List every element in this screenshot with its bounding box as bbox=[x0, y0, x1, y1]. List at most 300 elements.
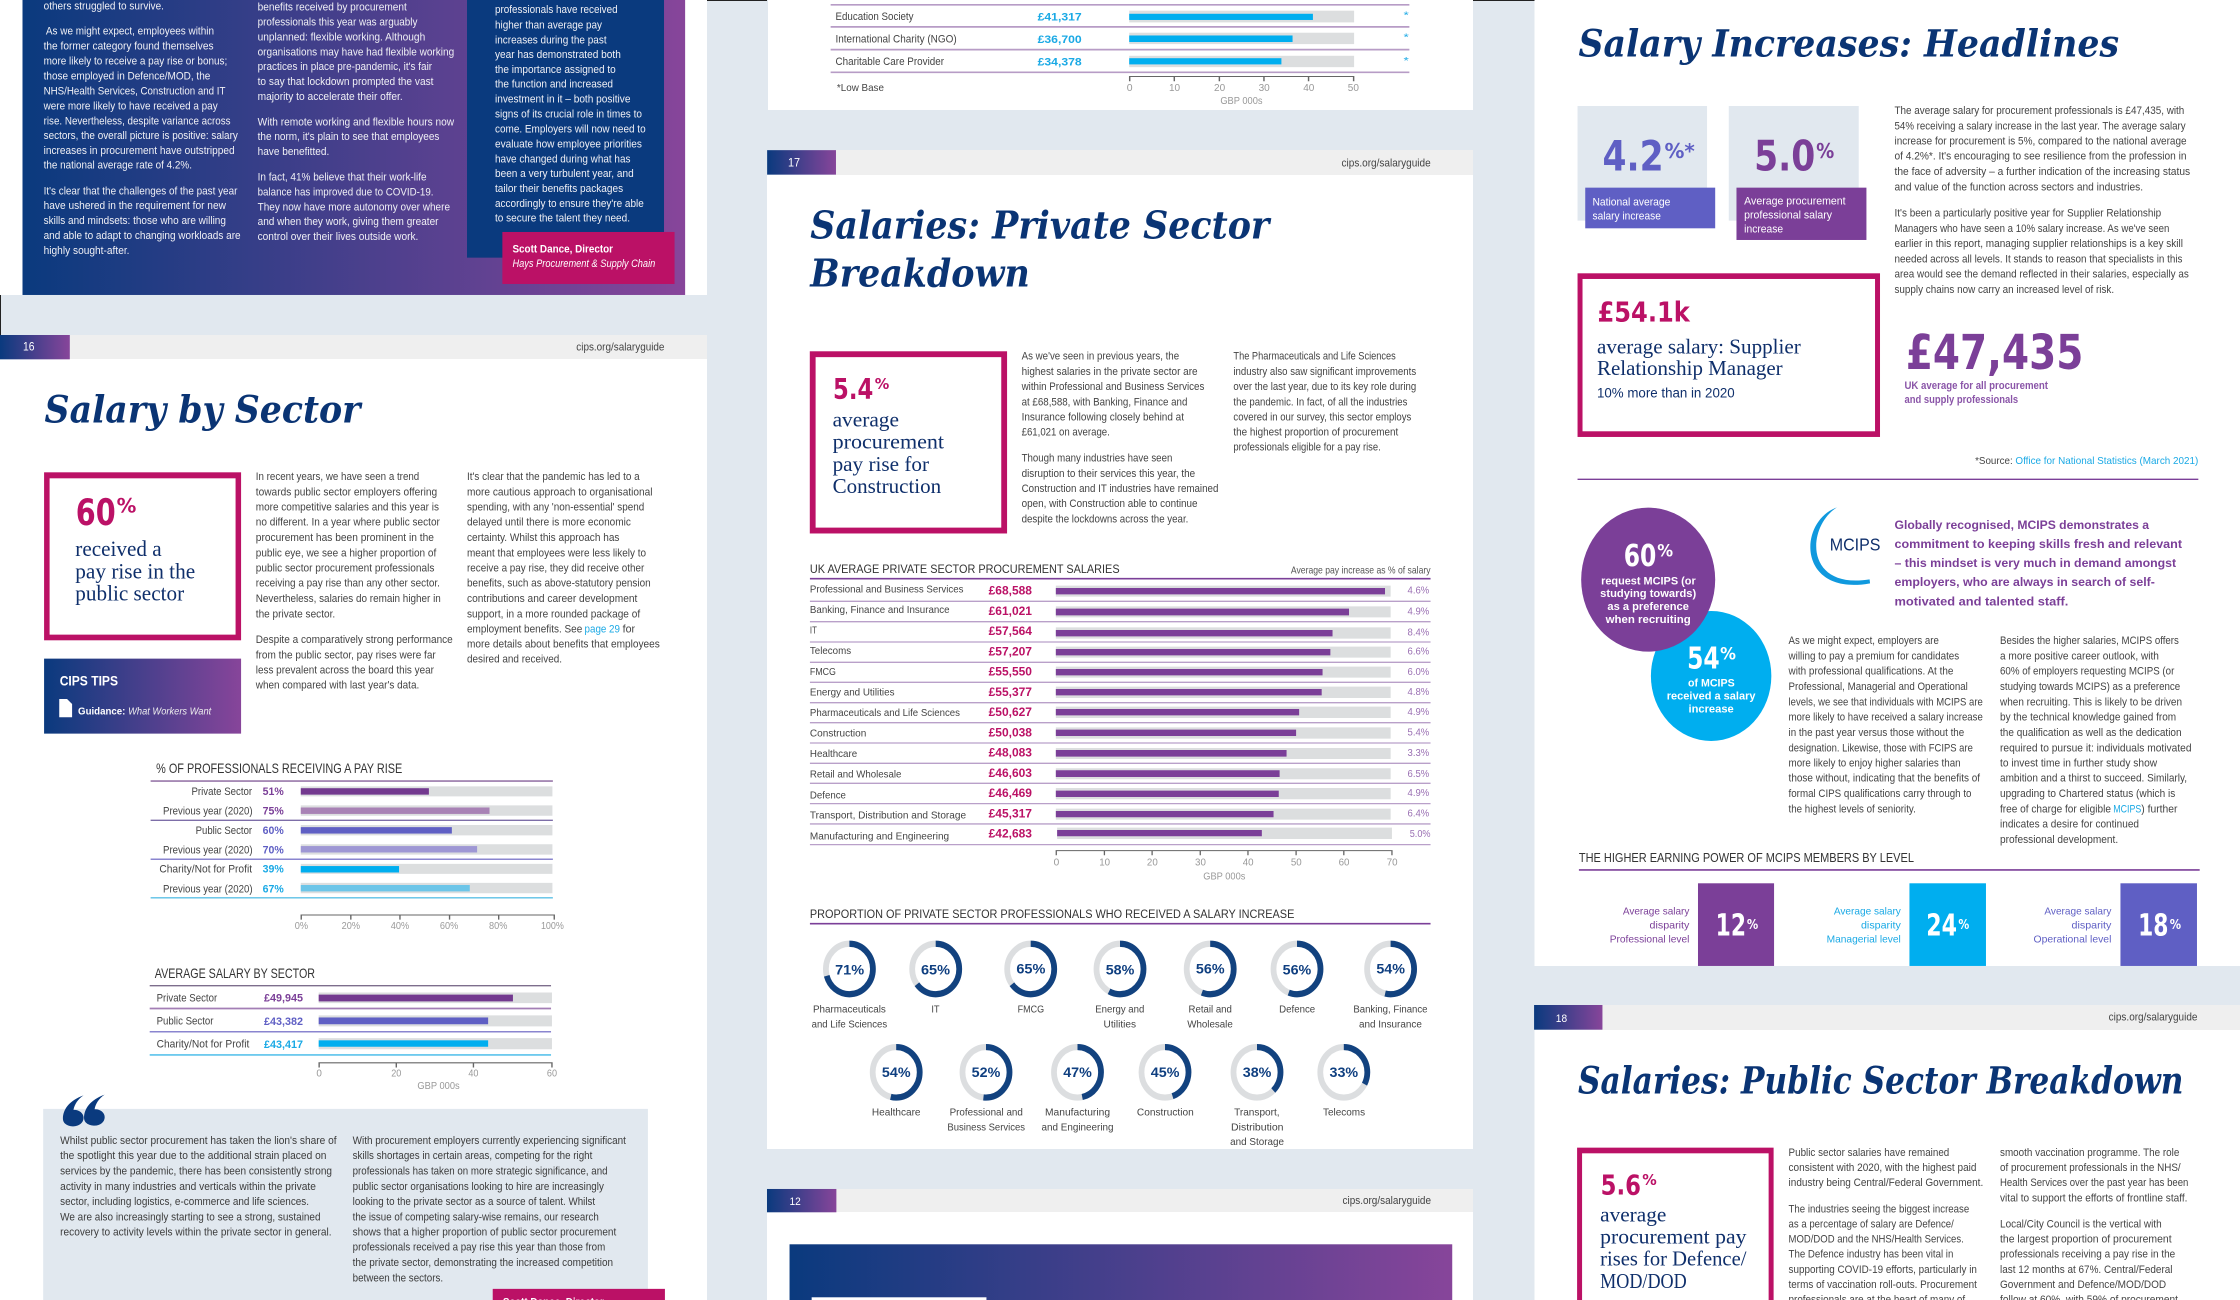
donut captions: Banking, Finance bbox=[1353, 1003, 1428, 1015]
text block: intro left: receiving a pay rise than any other sector. bbox=[256, 577, 440, 589]
panel: CIPS tips bbox=[44, 659, 241, 734]
donut percentages: 33% bbox=[1329, 1065, 1358, 1080]
axis bbox=[1054, 851, 1398, 882]
text block: right column: a more positive career outlook, with bbox=[2000, 649, 2159, 662]
text block: second column: unplanned: flexible working. Although bbox=[258, 30, 425, 43]
salary values: £48,083 bbox=[989, 746, 1032, 759]
salary values: £55,550 bbox=[989, 665, 1032, 678]
bar chart: percent receiving a pay rise: Public Sector bbox=[196, 824, 252, 836]
axis: 20 bbox=[1147, 857, 1158, 868]
text block: left: open, with Construction able to continue bbox=[1022, 497, 1198, 510]
bar chart: average salary by sector: 0 bbox=[316, 1069, 322, 1079]
title: Salaries: Private Sector bbox=[810, 203, 1272, 248]
callout: 5.4 percent: pay rise for bbox=[833, 452, 929, 476]
text block: quote right bbox=[353, 1134, 626, 1284]
text block: second column: organisations may have had flexible working bbox=[258, 45, 454, 58]
stat: procurement 5.0 percent bbox=[1729, 106, 1866, 240]
chart axis: 10 bbox=[1169, 83, 1180, 93]
text block: left column: The Defence industry has been vital in bbox=[1789, 1248, 1953, 1260]
donut captions: Telecoms bbox=[1323, 1106, 1365, 1118]
donut captions: Professional and bbox=[950, 1106, 1023, 1118]
text block: intro right: meant that employees were less likely to bbox=[467, 546, 646, 559]
text block: right column bbox=[1999, 634, 2192, 846]
callout: 5.6 percent: procurement pay bbox=[1600, 1226, 1747, 1248]
donut captions: and Life Sciences bbox=[812, 1018, 887, 1030]
bar chart: average salary by sector: 60 bbox=[547, 1069, 557, 1079]
stat: procurement 5.0 percent: 5.0 bbox=[1754, 132, 1815, 181]
text block: right column: Local/City Council is the vertical with bbox=[2000, 1217, 2162, 1230]
text block: intro right: for bbox=[623, 622, 636, 635]
circles: MCIPS statistics: as a preference bbox=[1607, 600, 1689, 613]
text block: first column: skills and mindsets: those who are willing bbox=[44, 214, 226, 227]
axis: 10 bbox=[1099, 857, 1110, 868]
stat: managerial level 24 percent: disparity bbox=[1861, 919, 1902, 931]
text block: third column: investment in it – both positive bbox=[495, 93, 630, 105]
circles: MCIPS statistics: 54 bbox=[1687, 640, 1720, 676]
pay increase percentages: 5.0% bbox=[1410, 829, 1431, 839]
callout: 5.6 percent: % bbox=[1642, 1172, 1657, 1189]
donut charts: proportion receiving a salary increase: PROPORTION OF PRIVATE SECTOR PROFESSIONALS WHO RECEIVED A SALARY INCREASE bbox=[810, 907, 1294, 921]
bar chart: percent receiving a pay rise: 67% bbox=[263, 883, 284, 895]
highlighted statement: motivated and talented staff. bbox=[1895, 595, 2068, 609]
chart row: education society: * bbox=[1404, 10, 1409, 21]
callout: 60 percent: % bbox=[117, 495, 136, 518]
icon: MCIPS arc: MCIPS bbox=[1830, 535, 1880, 555]
chart row: education society: Education Society bbox=[835, 10, 914, 23]
text block: intro left bbox=[255, 470, 453, 691]
text block: left column bbox=[1788, 634, 1983, 815]
donut captions: Utilities bbox=[1104, 1018, 1136, 1030]
text block: left: despite the lockdowns across the year. bbox=[1022, 513, 1188, 525]
page number badge: 18 bbox=[1556, 1012, 1567, 1024]
bar chart: average salary by sector: AVERAGE SALARY BY SECTOR bbox=[155, 967, 315, 981]
text block: right column: ) further bbox=[2141, 802, 2178, 815]
page number badge: 17 bbox=[788, 156, 800, 170]
text block: left column: more likely to enjoy higher salaries than bbox=[1789, 757, 1961, 769]
panel: CIPS tips: What Workers Want bbox=[128, 705, 212, 717]
donut percentages: 65% bbox=[921, 962, 950, 978]
text block: intro left: public sector procurement professionals bbox=[256, 561, 435, 574]
salary values: £61,021 bbox=[989, 605, 1032, 617]
text block: left column: industry being Central/Federal Government. bbox=[1789, 1176, 1983, 1189]
page number badge bbox=[767, 150, 836, 175]
panel: page 17 private sector breakdown bbox=[767, 150, 1473, 1149]
pay increase percentages: 4.9% bbox=[1408, 707, 1429, 718]
callout: 60 percent: pay rise in the bbox=[75, 558, 195, 583]
text block: left column: consistent with 2020, with the highest paid bbox=[1789, 1161, 1976, 1174]
donut percentages: 65% bbox=[1016, 962, 1045, 977]
callout: 60 percent: received a bbox=[75, 536, 162, 561]
text block: quote left: the spotlight this year due to the additional strain placed on bbox=[60, 1149, 326, 1162]
stat: professional level 12 percent: Average salary bbox=[1623, 905, 1690, 917]
text block: intro right: desired and received. bbox=[467, 653, 562, 665]
text block: first column: NHS/Health Services, Construction and IT bbox=[44, 84, 225, 97]
text block: intro left: public eye, we see a higher proportion of bbox=[256, 546, 436, 559]
text block: quote right: the issue of competing salary-wise remains, our research bbox=[353, 1210, 599, 1223]
salary values: £50,627 bbox=[989, 706, 1032, 719]
text block: first column: and able to adapt to changing workloads are bbox=[44, 229, 241, 242]
panel: page 16 salary by sector bbox=[0, 335, 707, 1300]
title: Breakdown bbox=[809, 251, 1030, 296]
bar chart: average salary by sector: Public Sector bbox=[157, 1015, 214, 1027]
text block: left column: as a percentage of salary are Defence/ bbox=[1789, 1217, 1954, 1230]
text block: intro right: support, in a more rounded package of bbox=[467, 607, 640, 620]
chart row: international charity: £36,700 bbox=[1038, 32, 1082, 45]
circles: MCIPS statistics: studying towards) bbox=[1600, 587, 1696, 600]
callout: 5.4 percent: average bbox=[833, 408, 899, 431]
bar chart: private sector salaries bbox=[810, 562, 1431, 882]
page number badge: 12 bbox=[790, 1195, 801, 1207]
pay increase percentages: 5.4% bbox=[1408, 728, 1429, 738]
chart axis bbox=[1127, 76, 1359, 107]
row labels: Energy and Utilities bbox=[810, 686, 895, 698]
highlighted statement: employers, who are always in search of self- bbox=[1895, 576, 2155, 589]
donut percentages: 38% bbox=[1243, 1065, 1271, 1080]
row labels: Pharmaceuticals and Life Sciences bbox=[810, 706, 960, 718]
stat: professional level 12 percent bbox=[1610, 883, 1774, 966]
text block: left column: As we might expect, employers are bbox=[1789, 634, 1939, 647]
bar chart: private sector salaries: Average pay increase as % of salary bbox=[1291, 566, 1431, 576]
callout: supplier relationship manager: Relationship Manager bbox=[1597, 357, 1783, 380]
text block: intro left: no different. In a year where public sector bbox=[256, 516, 440, 528]
stat: operational level 18 percent bbox=[2034, 883, 2197, 966]
text block: left: Insurance following closely behind at bbox=[1022, 411, 1184, 423]
text block: third column: professionals have received bbox=[495, 3, 618, 16]
attribution box bbox=[493, 1289, 665, 1300]
pay increase percentages: 6.6% bbox=[1408, 647, 1429, 657]
chart row: international charity: International Charity (NGO) bbox=[835, 33, 957, 45]
text block: right bbox=[1233, 350, 1416, 453]
text block: left column: the highest levels of seniority. bbox=[1789, 802, 1916, 815]
text block: right column: professional development. bbox=[2000, 833, 2118, 846]
text block: quote right: shows that a higher proportion of public sector procurement bbox=[353, 1225, 617, 1238]
panel: charity salaries fragment bbox=[768, 0, 1473, 110]
chart row: charitable care provider bbox=[835, 55, 1409, 68]
text block: quote right: the private sector, demonstrating the increased competition bbox=[353, 1256, 613, 1269]
text block: second column: balance has improved due to COVID-19. bbox=[258, 185, 433, 198]
text block: right column: indicates a desire for continued bbox=[2000, 818, 2139, 830]
icon: MCIPS arc bbox=[1810, 507, 1880, 585]
donut percentages: 71% bbox=[835, 962, 864, 978]
text block: first column: the former category found themselves bbox=[44, 40, 214, 52]
source note: *Source: bbox=[1975, 455, 2013, 466]
text block: right: professionals eligible for a pay rise. bbox=[1233, 441, 1381, 453]
site url: cips.org/salaryguide bbox=[1342, 156, 1431, 169]
stat: procurement 5.0 percent: increase bbox=[1744, 222, 1783, 235]
axis: 40 bbox=[1243, 857, 1254, 868]
row labels: Manufacturing and Engineering bbox=[810, 830, 949, 842]
pay increase percentages bbox=[1408, 586, 1431, 839]
text block: quote right: between the sectors. bbox=[353, 1271, 443, 1284]
row labels: Construction bbox=[810, 727, 866, 739]
circles: MCIPS statistics: % bbox=[1720, 644, 1736, 664]
bar chart: percent receiving a pay rise: 39% bbox=[263, 863, 284, 875]
text block: third column: higher than average pay bbox=[495, 18, 602, 31]
donut percentages: 54% bbox=[882, 1065, 911, 1080]
stat: operational level 18 percent: Operational level bbox=[2034, 933, 2111, 945]
text block: intro left: more competitive salaries and this year is bbox=[256, 501, 439, 513]
donut captions: Business Services bbox=[947, 1121, 1025, 1133]
circles: MCIPS statistics: 60 bbox=[1624, 537, 1656, 574]
bar chart: average salary by sector: Charity/Not for Profit bbox=[157, 1038, 250, 1050]
row labels: Telecoms bbox=[810, 645, 851, 657]
text block: second column: They now have more autonomy over where bbox=[258, 200, 450, 213]
chart row: charitable care provider: * bbox=[1404, 56, 1409, 67]
circles: MCIPS statistics: % bbox=[1657, 542, 1673, 561]
stat: professional level 12 percent: % bbox=[1747, 916, 1758, 932]
text block: second column: control over their lives outside work. bbox=[258, 230, 418, 243]
stat: national average 4.2 percent: %* bbox=[1664, 139, 1695, 163]
circles: MCIPS statistics: request MCIPS (or bbox=[1601, 574, 1696, 587]
text block: third column: the importance assigned to bbox=[495, 63, 616, 76]
text block: quote left: services by the pandemic, there has been consistently strong bbox=[60, 1164, 332, 1177]
text block: intro left: from the public sector, pay rises were far bbox=[256, 648, 436, 661]
donut captions: and Storage bbox=[1230, 1135, 1284, 1147]
circles: MCIPS statistics: increase bbox=[1688, 702, 1734, 715]
stat: national average 4.2 percent: salary increase bbox=[1592, 209, 1661, 222]
bar chart: percent receiving a pay rise: % OF PROFESSIONALS RECEIVING A PAY RISE bbox=[156, 762, 402, 777]
text block: second column: With remote working and flexible hours now bbox=[258, 115, 454, 128]
salary values: £42,683 bbox=[989, 827, 1032, 840]
donut captions: Pharmaceuticals bbox=[813, 1003, 886, 1015]
donut captions: Retail and bbox=[1189, 1003, 1232, 1015]
salary values: £57,564 bbox=[989, 625, 1032, 638]
row labels: Transport, Distribution and Storage bbox=[810, 809, 966, 821]
text block: left column: formal CIPS qualifications carry through to bbox=[1789, 787, 1971, 800]
pay increase percentages: 3.3% bbox=[1408, 748, 1429, 758]
callout: supplier relationship manager: £54.1k bbox=[1597, 296, 1690, 328]
text block: right column: to invest time in further study show bbox=[2000, 757, 2158, 769]
heading: earning power: THE HIGHER EARNING POWER OF MCIPS MEMBERS BY LEVEL bbox=[1579, 851, 1914, 865]
stat: managerial level 24 percent bbox=[1827, 883, 1986, 966]
text block: right: over the last year, due to its key role during bbox=[1233, 380, 1416, 393]
bar chart: average salary by sector: GBP 000s bbox=[417, 1081, 460, 1092]
text block: left: Construction and IT industries have remained bbox=[1022, 482, 1218, 495]
text block: intro right: more details about benefits that employees bbox=[467, 638, 660, 650]
text block: quote right: looking to the private sector as a source of talent. Whilst bbox=[353, 1195, 595, 1208]
text block: first column: highly sought-after. bbox=[44, 244, 129, 257]
donut captions: Construction bbox=[1137, 1106, 1194, 1118]
salary values bbox=[989, 584, 1032, 840]
pay increase percentages: 6.0% bbox=[1408, 667, 1429, 677]
text block: intro right: page 29 bbox=[585, 622, 620, 635]
text block: left: £61,021 on average. bbox=[1022, 426, 1110, 438]
text block: second column: practices in place pre-pandemic, it's fair bbox=[258, 60, 433, 73]
chart row: international charity: * bbox=[1404, 32, 1409, 43]
panel: page 18 public sector breakdown bbox=[1534, 1005, 2240, 1300]
donut percentages: 56% bbox=[1283, 962, 1311, 978]
text block: left: disruption to their services this year, the bbox=[1022, 467, 1195, 479]
stat: national average 4.2 percent bbox=[1578, 106, 1715, 228]
text block: third column: come. Employers will now need to bbox=[495, 122, 646, 135]
text block: quote left: recovery to activity levels within the private sector in general. bbox=[60, 1225, 332, 1238]
text block: intro left: Despite a comparatively strong performance bbox=[256, 633, 453, 646]
stat: operational level 18 percent: % bbox=[2170, 916, 2181, 932]
chart row: education society: £41,317 bbox=[1038, 10, 1082, 23]
bar chart: average salary by sector: £43,417 bbox=[264, 1037, 303, 1050]
text block: left bbox=[1021, 350, 1218, 525]
text block: first column bbox=[43, 0, 241, 257]
circles: MCIPS statistics: received a salary bbox=[1667, 690, 1756, 702]
callout: 5.6 percent bbox=[1577, 1148, 1774, 1300]
callout: supplier relationship manager: 10% more than in 2020 bbox=[1597, 385, 1735, 401]
site url: cips.org/salaryguide bbox=[1343, 1195, 1431, 1207]
text block: quote right: public sector organisations looking to hire are increasingly bbox=[353, 1180, 604, 1193]
text block: intro right: receive a pay rise, they did receive other bbox=[467, 561, 645, 574]
text block: third column: to secure the talent they need. bbox=[495, 212, 630, 224]
text block: right: the pandemic. In fact, of all the industries bbox=[1233, 395, 1408, 408]
bar chart: percent receiving a pay rise: 75% bbox=[263, 805, 284, 817]
text block: left: within Professional and Business Services bbox=[1021, 380, 1205, 393]
gradient banner bbox=[790, 1244, 1452, 1300]
text block: right column: the largest proportion of procurement bbox=[2000, 1232, 2172, 1245]
donut percentages: 45% bbox=[1151, 1065, 1179, 1080]
text block: quote left: We are also increasingly starting to see a strong, sustained bbox=[60, 1210, 321, 1223]
highlighted statement bbox=[1895, 519, 2182, 609]
text block: second column bbox=[258, 0, 454, 243]
chart row: education society bbox=[835, 10, 1409, 23]
axis: 70 bbox=[1387, 857, 1398, 868]
salary values: £46,469 bbox=[989, 787, 1032, 800]
stat: UK average salary bbox=[1904, 325, 2083, 406]
panel: salary increases headlines bbox=[1534, 0, 2240, 966]
text block: first column: increases in procurement have outstripped bbox=[44, 144, 235, 157]
source note bbox=[1975, 455, 2198, 466]
salary values: £55,377 bbox=[989, 686, 1032, 698]
stat: operational level 18 percent: 18 bbox=[2138, 907, 2168, 943]
bar chart: percent receiving a pay rise: Previous year (2020) bbox=[163, 844, 253, 856]
bar chart: percent receiving a pay rise: 60% bbox=[440, 921, 458, 932]
bar chart: percent receiving a pay rise: 0% bbox=[295, 921, 308, 932]
donut captions: Transport, bbox=[1234, 1106, 1280, 1118]
text block: second column: to say that lockdown prompted the vast bbox=[258, 75, 434, 88]
bar chart: percent receiving a pay rise: Previous year (2020) bbox=[163, 883, 253, 895]
bar chart: percent receiving a pay rise: Private Sector bbox=[191, 785, 252, 797]
donut captions bbox=[812, 1003, 1428, 1147]
pay increase percentages: 4.9% bbox=[1408, 788, 1429, 799]
text block: quote right: With procurement employers currently experiencing significant bbox=[353, 1134, 626, 1147]
chart row: international charity bbox=[835, 32, 1409, 45]
text block: intro right bbox=[467, 470, 660, 665]
text block: left column: more likely to have received a salary increase bbox=[1789, 710, 1983, 723]
donut captions: and Insurance bbox=[1359, 1018, 1422, 1030]
callout: supplier relationship manager: average salary: Supplier bbox=[1597, 336, 1801, 358]
text block: headline summary: supply chains now carry an increased level of risk. bbox=[1895, 283, 2114, 296]
bar chart: private sector salaries: UK AVERAGE PRIVATE SECTOR PROCUREMENT SALARIES bbox=[810, 562, 1120, 576]
panel: page 12 fragment bbox=[767, 1189, 1473, 1300]
bar chart: percent receiving a pay rise: Charity/Not for Profit bbox=[159, 863, 253, 875]
text block: third column bbox=[495, 3, 646, 224]
row labels: Banking, Finance and Insurance bbox=[810, 603, 950, 615]
text block: left column: with professional qualifications. At the bbox=[1788, 665, 1953, 677]
text block: right column: free of charge for eligible bbox=[2000, 802, 2111, 815]
text block: intro left: when compared with last year's data. bbox=[255, 679, 419, 691]
bar chart: percent receiving a pay rise: 80% bbox=[489, 921, 507, 932]
attribution box: Scott Dance, Director bbox=[512, 242, 613, 255]
text block: right: the highest proportion of procurement bbox=[1233, 426, 1398, 438]
text block: first column: the national average rate of 4.2%. bbox=[44, 159, 192, 171]
chart axis: 20 bbox=[1214, 83, 1226, 93]
panel: quote bbox=[43, 1095, 665, 1300]
text block: third column: tailor their benefits packages bbox=[495, 182, 623, 195]
page number badge bbox=[1534, 1005, 1602, 1030]
text block: quote left: activity in many industries and verticals within the private bbox=[60, 1180, 316, 1193]
salary values: £57,207 bbox=[989, 645, 1032, 658]
axis: GBP 000s bbox=[1203, 871, 1246, 882]
text block: left column: willing to pay a premium for candidates bbox=[1788, 649, 1960, 662]
axis: 0 bbox=[1054, 857, 1059, 868]
text block: intro right: certainty. Whilst this approach has bbox=[467, 531, 620, 544]
stat: professional level 12 percent: 12 bbox=[1716, 907, 1746, 943]
callout: 5.6 percent: rises for Defence/ bbox=[1600, 1248, 1747, 1271]
text block: third column: the function and increased bbox=[495, 78, 613, 90]
stat: UK average salary: £47,435 bbox=[1906, 325, 2083, 381]
text block: right column: MCIPS bbox=[2113, 802, 2141, 815]
bar chart: percent receiving a pay rise: Previous year (2020) bbox=[163, 805, 253, 817]
bar chart: percent receiving a pay rise: 70% bbox=[263, 844, 284, 856]
callout: 60 percent bbox=[44, 472, 241, 640]
donut captions: Manufacturing bbox=[1045, 1106, 1110, 1118]
bar chart: average salary by sector: £43,382 bbox=[264, 1015, 303, 1028]
pay increase percentages: 6.5% bbox=[1408, 769, 1429, 780]
pay increase percentages: 4.6% bbox=[1408, 586, 1429, 596]
stat: managerial level 24 percent: Managerial level bbox=[1827, 933, 1901, 945]
row labels: Defence bbox=[810, 789, 846, 801]
axis: 30 bbox=[1195, 857, 1206, 868]
text block: left column: Public sector salaries have remained bbox=[1789, 1146, 1949, 1159]
text block: quote right: professionals has taken on more strategic significance, and bbox=[353, 1164, 608, 1177]
text block: intro right: more cautious approach to organisational bbox=[467, 485, 653, 498]
pay increase percentages: 6.4% bbox=[1408, 809, 1429, 819]
stat: UK average salary: UK average for all procurement bbox=[1904, 379, 2049, 392]
text block: first column: more likely to receive a pay rise or bonus; bbox=[44, 55, 227, 67]
axis: 60 bbox=[1339, 857, 1349, 868]
text block: intro left: procurement has been prominent in the bbox=[256, 531, 434, 544]
text block: left column bbox=[1789, 1146, 1983, 1300]
pay increase percentages: 4.9% bbox=[1408, 607, 1429, 617]
bar chart: average salary by sector: £49,945 bbox=[264, 991, 303, 1004]
callout: 60 percent: 60 bbox=[76, 492, 116, 534]
callout: 5.4 percent: % bbox=[875, 376, 889, 393]
text block: quote left bbox=[60, 1134, 337, 1238]
text block: third column: signs of its crucial role in times to bbox=[495, 108, 642, 120]
text block: quote left: sector, including logistics, e-commerce and life sciences. bbox=[60, 1195, 309, 1208]
icon: quotation mark bbox=[63, 1095, 105, 1126]
bar chart: average salary by sector bbox=[150, 967, 557, 1092]
text block: right column bbox=[2000, 1146, 2188, 1300]
salary values: £50,038 bbox=[989, 726, 1032, 739]
text block: second column: and when they work, giving them greater bbox=[258, 215, 439, 228]
page number badge bbox=[0, 335, 70, 359]
row labels: Healthcare bbox=[810, 748, 857, 760]
salary values: £68,588 bbox=[989, 584, 1032, 597]
stat: national average 4.2 percent: National average bbox=[1592, 195, 1670, 208]
text block: headline summary bbox=[1895, 104, 2191, 296]
bar chart: average salary by sector: Private Sector bbox=[157, 992, 217, 1004]
stat: operational level 18 percent: Average salary bbox=[2044, 905, 2112, 917]
chart axis: 30 bbox=[1259, 83, 1270, 93]
text block: left column: levels, we see that individuals with MCIPS are bbox=[1789, 695, 1983, 708]
text block: right: industry also saw significant improvements bbox=[1233, 365, 1416, 377]
bar chart: percent receiving a pay rise bbox=[151, 762, 564, 932]
text block: left column: those without, indicating that the benefits of bbox=[1789, 772, 1980, 784]
text block: left column: in the past year versus those without the bbox=[1789, 726, 1964, 739]
text block: second column: professionals this year was arguably bbox=[258, 15, 418, 28]
text block: third column: been a very turbulent year, and bbox=[495, 167, 634, 180]
text block: left column: The industries seeing the biggest increase bbox=[1789, 1202, 1969, 1215]
row labels: FMCG bbox=[810, 665, 836, 677]
text block: left column: terms of vaccination roll-outs. Procurement bbox=[1789, 1278, 1977, 1291]
